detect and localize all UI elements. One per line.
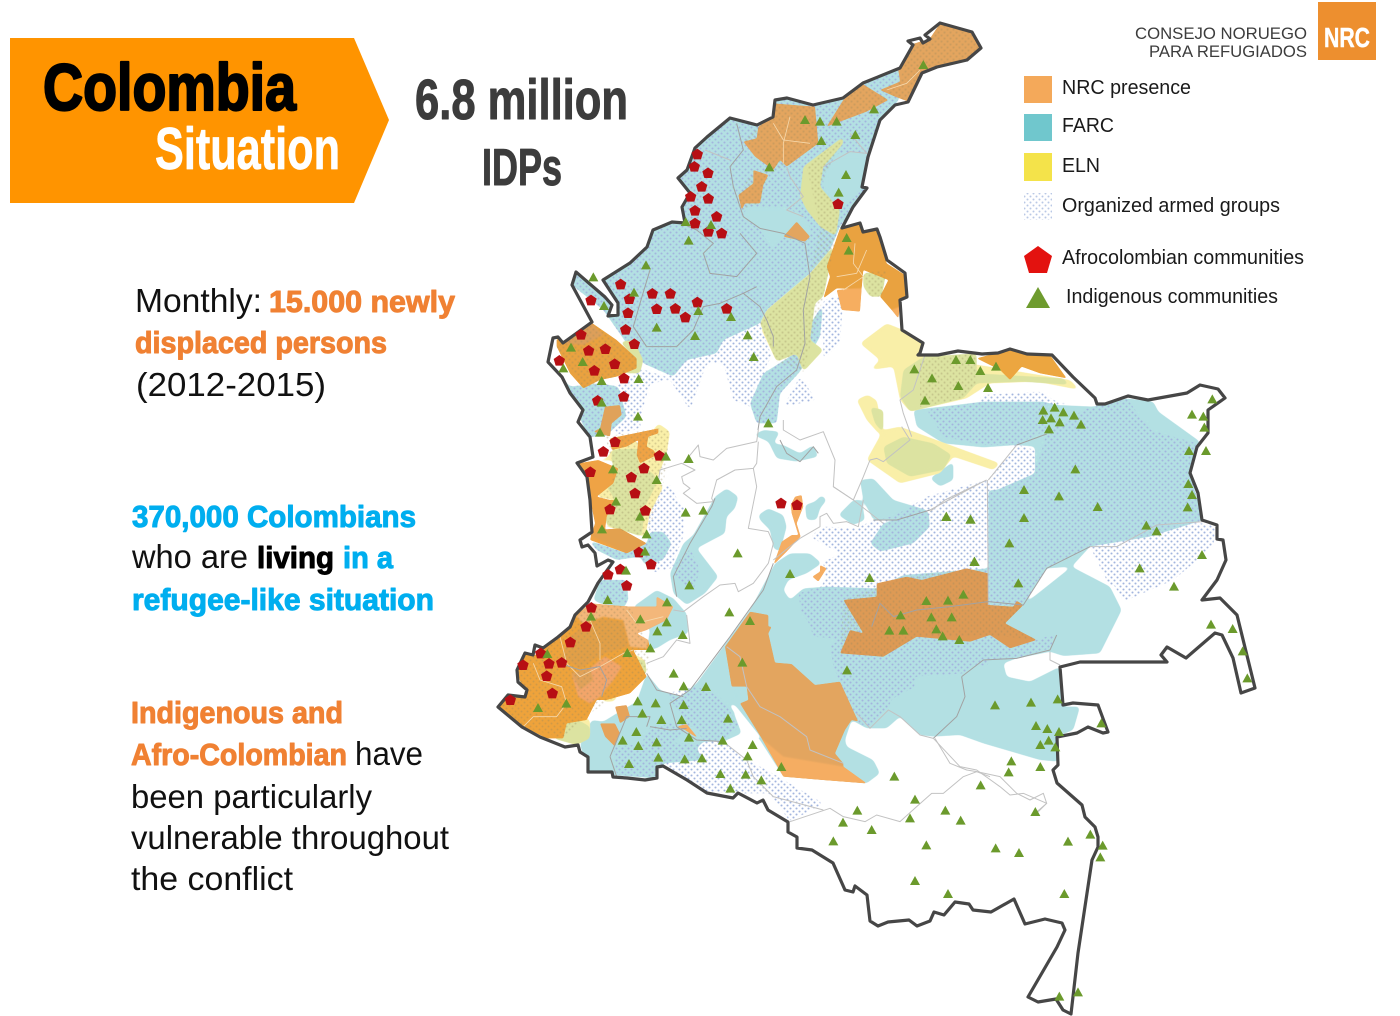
ELN presence areas (553, 323, 1080, 745)
NRC logo: NRC (1324, 22, 1370, 53)
FARC presence areas (547, 43, 1203, 783)
legend: FARC: FARC (1062, 115, 1114, 137)
NRC logo: PARA REFUGIADOS (1149, 42, 1307, 61)
text block: vulnerable communities: have (355, 735, 423, 772)
undotted FARC patches (728, 153, 867, 740)
text block: refugee-like situation: living (257, 540, 334, 575)
text block: vulnerable communities: vulnerable throughout (131, 819, 449, 856)
legend: Indigenous communities: Indigenous communities (1066, 286, 1278, 308)
Indigenous community markers (533, 60, 1252, 1001)
NRC logo (1135, 2, 1376, 61)
legend: ELN: ELN (1062, 155, 1100, 177)
text block: vulnerable communities: Afro-Colombian (131, 737, 347, 772)
legend: NRC presence (1024, 76, 1191, 103)
NRC logo: CONSEJO NORUEGO (1135, 24, 1307, 43)
title: Colombia: Colombia (43, 50, 297, 124)
map of Colombia (496, 21, 1257, 1016)
text block: monthly displacement: displaced persons (135, 325, 387, 360)
text block: refugee-like situation: 370,000 Colombians (132, 499, 416, 534)
legend (1024, 76, 1304, 308)
headline figure: 6.8 million IDPs: 6.8 million (415, 68, 628, 132)
text block: vulnerable communities (131, 695, 449, 897)
legend: Organized armed groups (1024, 193, 1280, 220)
dot texture over coloured areas (498, 23, 1037, 738)
Organized armed groups dot areas (569, 43, 1214, 820)
text block: vulnerable communities: Indigenous and (131, 695, 343, 730)
text block: monthly displacement (135, 282, 456, 403)
text block: monthly displacement: 15.000 newly (269, 284, 456, 319)
text block: refugee-like situation: who are (131, 538, 248, 575)
text block: monthly displacement: (2012-2015) (136, 366, 326, 403)
headline figure: 6.8 million IDPs: IDPs (482, 139, 562, 197)
legend: Afrocolombian communities (1024, 246, 1304, 273)
text block: vulnerable communities: the conflict (131, 860, 293, 897)
headline figure: 6.8 million IDPs (415, 68, 628, 197)
text block: refugee-like situation: in a (343, 540, 394, 575)
country outline (498, 23, 1255, 1014)
legend: ELN (1024, 153, 1100, 181)
legend: NRC presence: NRC presence (1062, 77, 1191, 99)
legend: Afrocolombian communities: Afrocolombian communities (1062, 247, 1304, 269)
department boundaries (523, 70, 1203, 822)
text block: vulnerable communities: been particularly (131, 778, 372, 815)
title banner (10, 38, 389, 203)
legend: Organized armed groups: Organized armed groups (1062, 195, 1280, 217)
text block: refugee-like situation: refugee-like situation (132, 582, 434, 617)
text block: refugee-like situation (131, 499, 434, 617)
NRC presence areas (498, 23, 1067, 783)
subtitle: Situation: Situation (155, 116, 340, 182)
text block: monthly displacement: Monthly: (135, 282, 262, 319)
Afrocolombian community markers (505, 149, 844, 705)
legend: FARC (1024, 114, 1114, 141)
ELN and FARC overlap areas (553, 137, 1070, 745)
